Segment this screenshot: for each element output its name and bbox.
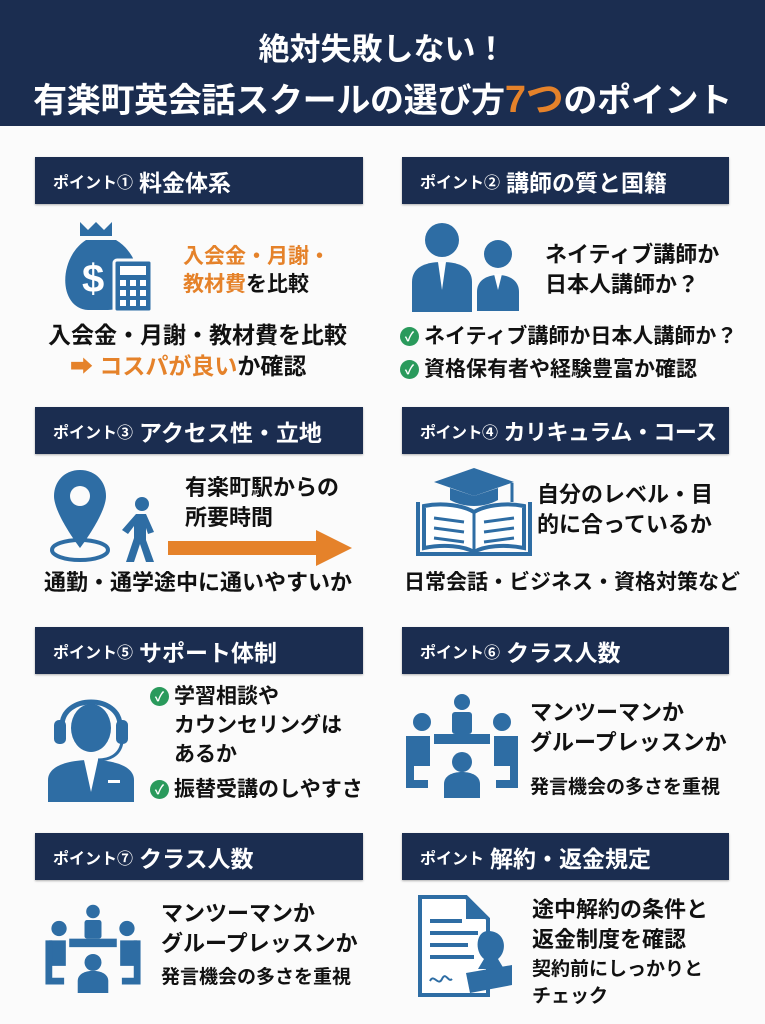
icon: meeting group: [406, 694, 518, 798]
title banner: [0, 0, 765, 126]
text: private or group 2: マンツーマンか: [161, 901, 315, 926]
checklist: teachers: [400, 324, 737, 381]
header: contract: ポイント: [420, 850, 484, 868]
checklist: support: ✓: [155, 689, 164, 704]
text: speaking chances: 発言機会の多さを重視: [530, 777, 720, 798]
text: native or japanese: [545, 242, 719, 297]
icon: money bag and calculator: $: [82, 257, 104, 301]
icon: book with cap: [416, 468, 532, 556]
checklist: teachers: ✓: [405, 329, 414, 344]
text: cost check: ➡ コスパが良いか確認: [70, 353, 306, 379]
header: point 4: ポイント④: [420, 424, 498, 442]
header: point 7: [35, 833, 363, 880]
header: point 6: クラス人数: [506, 640, 621, 666]
text: fee comparison: [183, 244, 330, 296]
icon: meeting group 2: [45, 904, 141, 993]
text: private or group 2: グループレッスンか: [161, 931, 358, 956]
text: private or group: [530, 700, 727, 755]
header: point 1: ポイント①: [53, 174, 133, 192]
text: level and goal: [537, 482, 713, 537]
header: contract: [402, 833, 729, 880]
header: point 2: ポイント②: [420, 174, 500, 192]
header: point 5: [35, 627, 363, 674]
text: cancellation conditions: 途中解約の条件と: [532, 897, 708, 922]
header: point 2: 講師の質と国籍: [506, 170, 667, 196]
header: point 3: アクセス性・立地: [139, 420, 322, 446]
check item: rescheduling: ✓: [155, 782, 164, 797]
header: point 3: ポイント③: [53, 424, 133, 442]
header: point 4: カリキュラム・コース: [504, 420, 717, 444]
checklist: support: 学習相談や: [174, 685, 279, 708]
text: fee comparison: 教材費を比較: [183, 273, 309, 296]
icon: location pin and walker: [50, 470, 154, 562]
text: check before contract: 契約前にしっかりと: [532, 959, 703, 980]
header: point 7: ポイント⑦: [53, 850, 133, 868]
header: point 4: [402, 407, 729, 454]
checklist: teachers: ✓: [405, 362, 414, 377]
header: point 6: [402, 627, 729, 674]
header: point 7: クラス人数: [139, 846, 254, 872]
header: point 1: 料金体系: [139, 170, 231, 196]
arrow: orange: [168, 530, 352, 566]
checklist: support: あるか: [174, 743, 237, 766]
checklist: teachers: ネイティブ講師か日本人講師か？: [424, 325, 737, 348]
checklist: support: カウンセリングは: [174, 714, 342, 737]
header: point 2: [402, 157, 729, 204]
text: private or group: マンツーマンか: [530, 700, 684, 725]
header: contract: 解約・返金規定: [490, 846, 651, 872]
text: native or japanese: 日本人講師か？: [545, 272, 699, 297]
text: course types: 日常会話・ビジネス・資格対策など: [404, 571, 740, 594]
checklist: support: [150, 684, 342, 766]
header: point 5: ポイント⑤: [53, 644, 133, 662]
text: private or group: グループレッスンか: [530, 730, 727, 755]
header: point 3: [35, 407, 363, 454]
header: point 5: サポート体制: [139, 640, 277, 666]
text: cancellation conditions: 返金制度を確認: [532, 927, 686, 952]
header: point 6: ポイント⑥: [420, 644, 500, 662]
text: commute: 通勤・通学途中に通いやすいか: [44, 570, 352, 595]
title line 1: 絶対失敗しない！: [258, 32, 506, 67]
checklist: teachers: 資格保有者や経験豊富か確認: [424, 358, 697, 381]
text: level and goal: 的に合っているか: [537, 512, 712, 537]
text: from station: [185, 475, 339, 530]
text: native or japanese: ネイティブ講師か: [545, 242, 719, 267]
text: speaking chances 2: 発言機会の多さを重視: [161, 967, 351, 988]
text: fee comparison: 入会金・月謝・: [183, 245, 330, 268]
text: from station: 有楽町駅からの: [185, 475, 339, 500]
check item: rescheduling: 振替受講のしやすさ: [174, 778, 363, 801]
icon: money bag and calculator: [65, 222, 150, 310]
text: level and goal: 自分のレベル・目: [537, 482, 713, 507]
icon: teachers: [412, 223, 519, 312]
text: check before contract: チェック: [532, 986, 608, 1007]
icon: contract document with stamp: [418, 895, 512, 997]
icon: support operator: [48, 700, 134, 802]
text: from station: 所要時間: [185, 505, 273, 530]
header: point 1: [35, 157, 363, 204]
text: check before contract: [532, 958, 703, 1007]
title line 2: 有楽町英会話スクールの選び方7つのポイント: [33, 79, 732, 121]
text: cost check: 入会金・月謝・教材費を比較: [48, 322, 347, 348]
text: private or group 2: [161, 901, 358, 956]
text: cancellation conditions: [532, 897, 708, 952]
text: cost check: [48, 322, 347, 379]
